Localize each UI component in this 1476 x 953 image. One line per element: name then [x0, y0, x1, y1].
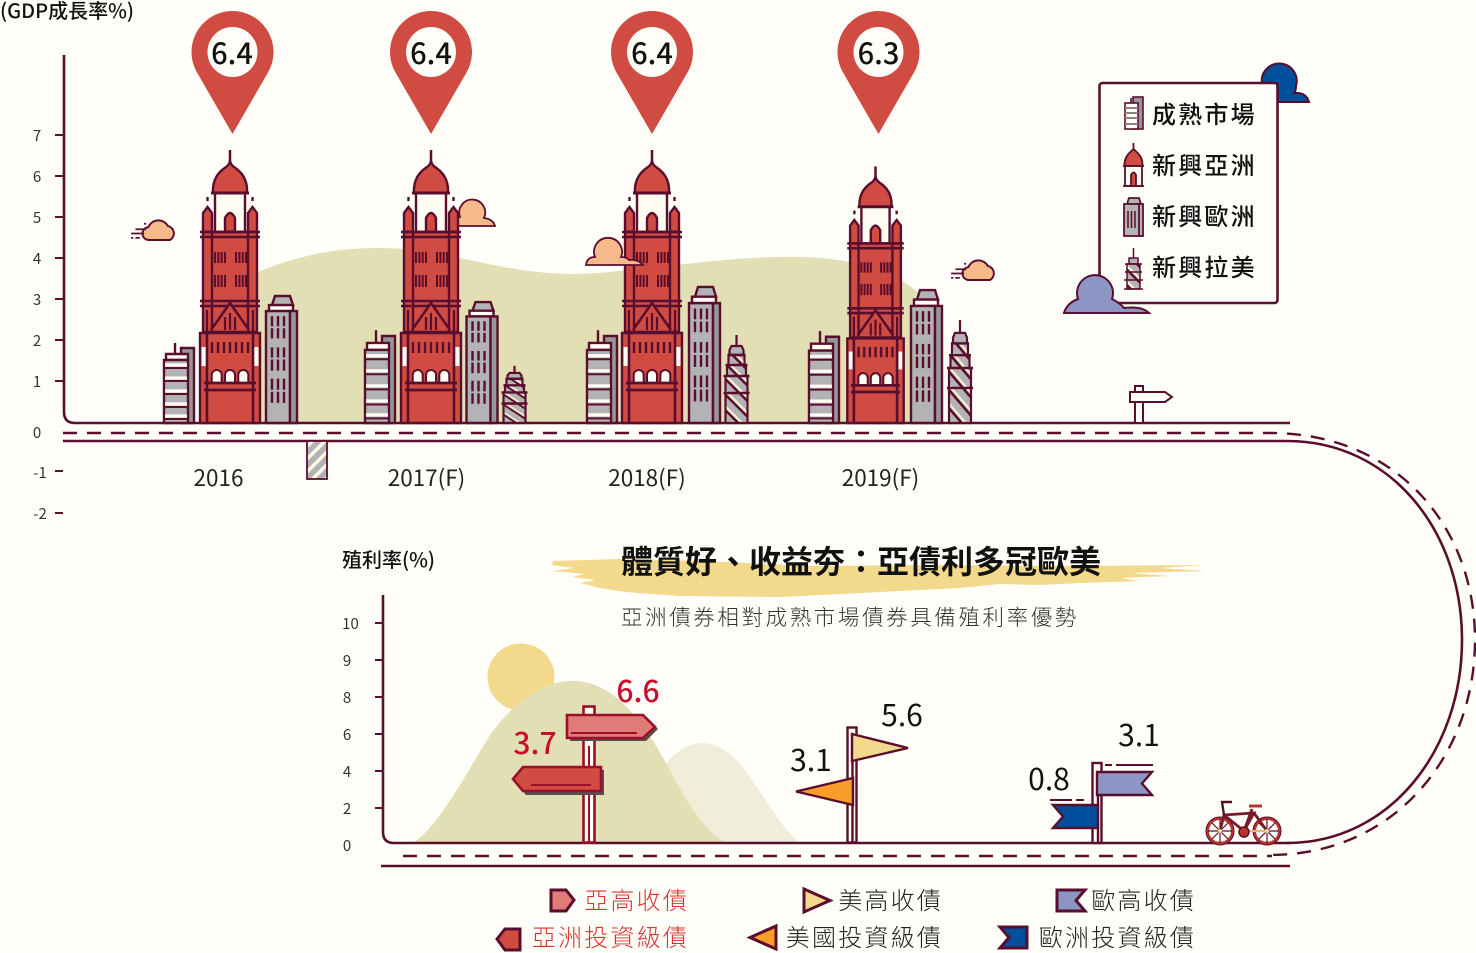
2018 buildings	[587, 150, 750, 423]
y axis tick labels	[33, 125, 47, 524]
brush stroke	[552, 559, 1206, 597]
map pin 2017: 6.4: 6.4	[410, 31, 452, 73]
sign: Asia investment grade 3.7	[513, 767, 604, 795]
y axis tick labels: 2	[33, 330, 41, 351]
Asia signpost	[513, 706, 658, 843]
icon: mature market	[1125, 97, 1143, 129]
value 3.1 US: 3.1	[790, 736, 832, 780]
icon: emerging LatAm	[1124, 248, 1143, 289]
yield axis labels: 9	[343, 650, 351, 671]
map pin 2018: 6.4	[611, 11, 693, 134]
value 3.1 Europe: 3.1	[1118, 711, 1160, 755]
negative bar 2016	[307, 441, 327, 479]
2017 buildings	[365, 150, 528, 423]
map pin 2016: 6.4: 6.4	[211, 31, 253, 73]
year labels: 2016	[194, 461, 243, 493]
y axis tick labels: 6	[33, 166, 41, 187]
key: US high yield: 美高收債	[838, 881, 943, 916]
y axis tick labels: 3	[33, 289, 41, 310]
lower axis and road lines	[375, 595, 1290, 866]
year labels	[194, 461, 919, 493]
flag: Europe investment grade	[1053, 805, 1098, 828]
key: Europe investment grade: 歐洲投資級債	[1039, 918, 1196, 953]
value 6.6: 6.6	[616, 667, 660, 711]
cloud over 2018 tower	[586, 238, 643, 265]
value 0.8: 0.8	[1028, 755, 1070, 799]
road sign upper right	[1130, 386, 1172, 423]
value 3.7: 3.7	[513, 719, 557, 763]
2016 buildings	[164, 150, 297, 423]
map pin 2019: 6.3: 6.3	[858, 31, 899, 73]
sun	[488, 644, 554, 710]
subtitle: 亞洲債券相對成熟市場債券具備殖利率優勢	[621, 601, 1079, 632]
panel: region legend	[1100, 83, 1278, 303]
y axis tick labels: 5	[33, 207, 41, 228]
yield axis labels: 4	[343, 761, 351, 782]
y axis tick labels: -2	[33, 503, 47, 524]
value 5.6: 5.6	[881, 691, 923, 735]
yield axis labels: 0	[343, 835, 351, 856]
y axis tick labels: 0	[33, 422, 41, 443]
flag: Europe high yield	[1097, 772, 1152, 795]
legend text: emerging Asia: 新興亞洲	[1152, 146, 1257, 181]
speed clouds and skyline clouds	[131, 200, 994, 280]
yield axis labels: 6	[343, 724, 351, 745]
legend text: mature market: 成熟市場	[1152, 95, 1257, 130]
y axis tick labels: 7	[33, 125, 41, 146]
2019 buildings	[809, 166, 973, 423]
US flags	[796, 728, 908, 843]
sign: Asia high yield 6.6	[567, 715, 658, 741]
key: Asia high yield: 亞高收債	[584, 881, 689, 916]
small hill	[640, 743, 800, 843]
map pin 2016: 6.4	[192, 11, 274, 134]
big hill	[413, 681, 727, 843]
map pin 2019: 6.3	[838, 11, 919, 134]
map pin 2017: 6.4	[390, 11, 472, 134]
key: Asia investment grade: 亞洲投資級債	[532, 918, 689, 953]
year labels: 2018(F)	[608, 461, 686, 493]
flag: US high yield	[852, 734, 908, 761]
yield axis labels	[342, 613, 359, 856]
y axis tick labels: 1	[33, 371, 41, 392]
bicycle	[1206, 802, 1281, 845]
icon: emerging Europe	[1124, 198, 1143, 236]
map pin 2018: 6.4: 6.4	[631, 31, 673, 73]
legend text: emerging Europe: 新興歐洲	[1152, 197, 1257, 232]
yield axis labels: 8	[343, 687, 351, 708]
key: US investment grade: 美國投資級債	[786, 918, 943, 953]
y axis tick labels: 4	[33, 248, 41, 269]
key: Europe high yield: 歐高收債	[1091, 881, 1196, 916]
yield axis labels: 2	[343, 798, 351, 819]
yield axis labels: 10	[342, 613, 359, 634]
legend text: emerging LatAm: 新興拉美	[1152, 248, 1257, 283]
year labels: 2017(F)	[388, 461, 465, 493]
icon: emerging Asia	[1123, 143, 1144, 186]
Europe flags	[1050, 763, 1153, 843]
hill backdrop behind skyline	[256, 248, 925, 423]
y axis label: yield: 殖利率(%)	[342, 544, 435, 573]
cloud: purple	[1064, 275, 1149, 313]
cloud: blue	[1262, 63, 1309, 102]
flag: US investment grade	[796, 778, 853, 805]
title: 體質好、收益夯：亞債利多冠歐美	[621, 537, 1101, 583]
year labels: 2019(F)	[842, 461, 919, 493]
y axis tick labels: -1	[33, 462, 47, 483]
